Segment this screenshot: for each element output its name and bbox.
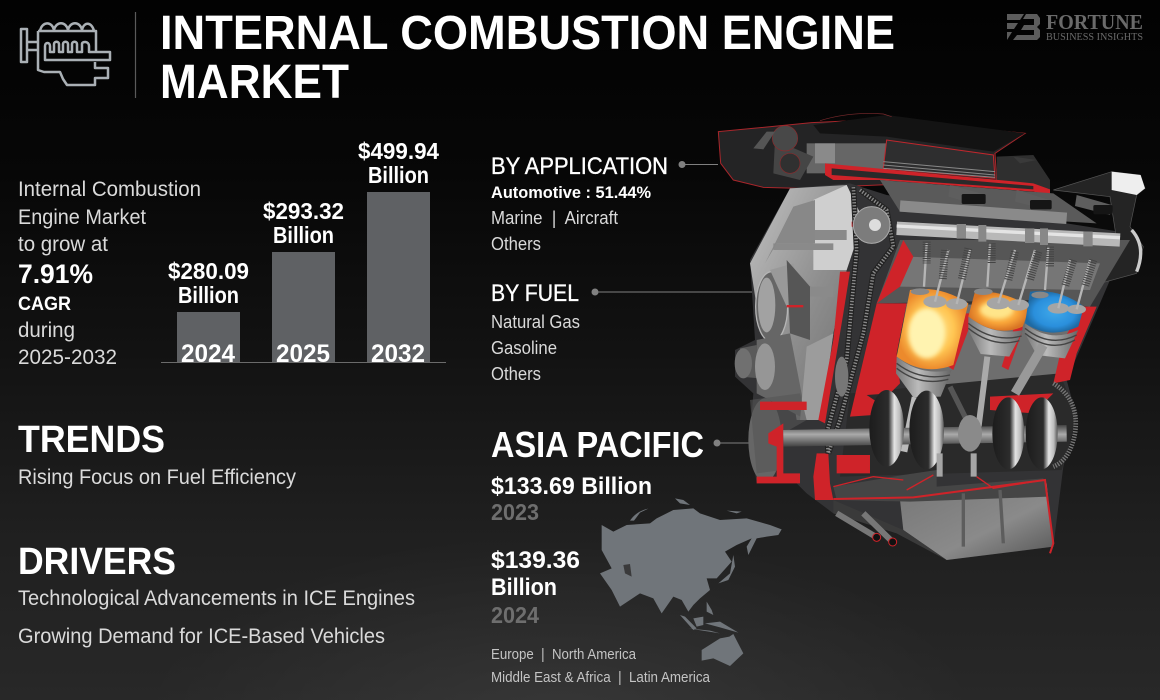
- flywheel: [1053, 383, 1076, 467]
- panel: Asia Pacific: $139.36: [491, 547, 580, 574]
- panel: by fuel: [491, 280, 580, 384]
- bar chart: market size: $293.32: [263, 198, 344, 224]
- timing cover: [750, 185, 863, 420]
- panel: by fuel: Gasoline: [491, 338, 557, 358]
- bar chart: market size: Billion: [273, 222, 334, 248]
- red head band: [825, 163, 1050, 195]
- panel: by application: Marine | Aircraft: [491, 208, 618, 228]
- title: MARKET: [160, 56, 349, 109]
- connecting rods: [904, 397, 915, 452]
- panel: drivers: Growing Demand for ICE-Based Vehicles: [18, 625, 385, 648]
- camshaft: [900, 206, 1067, 218]
- panel: Asia Pacific: $133.69 Billion: [491, 473, 652, 500]
- panel: by application: Others: [491, 234, 541, 254]
- crankshaft: [783, 433, 1067, 438]
- valves and springs: [911, 288, 1086, 314]
- panel: Asia Pacific: 2024: [491, 602, 539, 628]
- map: Asia Pacific: [600, 498, 782, 666]
- text block: CAGR summary: 7.91%: [18, 259, 93, 289]
- bar chart: market size: 2024: [181, 340, 235, 368]
- valve train bay: [877, 240, 1130, 307]
- cylinder walls: [897, 303, 1090, 393]
- pistons: [896, 357, 952, 397]
- panel: by application: [491, 153, 668, 254]
- ignition coils: [948, 185, 1113, 215]
- icon: engine outline: [21, 23, 110, 85]
- panel: trends: Rising Focus on Fuel Efficiency: [18, 466, 296, 489]
- text block: CAGR summary: Engine Market: [18, 206, 146, 229]
- cylinder 1 flame: [897, 289, 968, 369]
- bar chart: market size: 2032: [371, 340, 425, 368]
- bar chart: market size: [161, 138, 446, 368]
- logo: Fortune Business Insights: [1007, 10, 1143, 43]
- panel: drivers: Technological Advancements in ICE Engines: [18, 587, 415, 610]
- panel: drivers: DRIVERS: [18, 541, 176, 583]
- red cut sections: [787, 222, 1097, 500]
- panel: Asia Pacific: [491, 424, 711, 686]
- panel: Asia Pacific: Europe | North America: [491, 647, 637, 663]
- illustration: engine cutaway: [718, 113, 1145, 560]
- timing chain: [827, 187, 893, 453]
- cylinder 3 flame: [1025, 291, 1084, 333]
- text block: CAGR summary: Internal Combustion: [18, 178, 201, 201]
- title: [160, 7, 895, 109]
- title divider: [134, 12, 136, 98]
- bar chart: market size: 2025: [276, 340, 330, 368]
- panel: Asia Pacific: ASIA PACIFIC: [491, 424, 704, 465]
- bar chart: market size: Billion: [368, 162, 429, 188]
- text block: CAGR summary: 2025-2032: [18, 346, 117, 369]
- panel: by fuel: Others: [491, 364, 541, 384]
- panel: Asia Pacific: 2023: [491, 499, 539, 525]
- oil pipes: [837, 513, 893, 542]
- bar chart: market size: $499.94: [358, 138, 439, 164]
- panel: by application: BY APPLICATION: [491, 153, 668, 180]
- callout connectors: [592, 161, 756, 446]
- panel: Asia Pacific: Middle East & Africa | Latin America: [491, 670, 711, 686]
- bar chart: market size: $280.09: [168, 258, 249, 284]
- text block: CAGR summary: [18, 178, 201, 369]
- panel: by application: Automotive : 51.44%: [491, 183, 651, 202]
- panel: by fuel: BY FUEL: [491, 280, 579, 307]
- panel: trends: [18, 419, 296, 489]
- oil sump: [900, 483, 1053, 560]
- text block: CAGR summary: CAGR: [18, 294, 71, 315]
- panel: by fuel: Natural Gas: [491, 312, 580, 332]
- engine silhouette: [735, 183, 1130, 560]
- text block: CAGR summary: to grow at: [18, 233, 108, 256]
- logo: Fortune Business Insights: BUSINESS INSIGHTS: [1046, 32, 1143, 43]
- panel: drivers: [18, 541, 415, 648]
- lower pulley: [748, 398, 782, 482]
- cylinder 2 flame: [968, 292, 1030, 331]
- crank bay: [840, 373, 1077, 477]
- intake cover: [718, 119, 1025, 188]
- title: INTERNAL COMBUSTION ENGINE: [160, 7, 895, 60]
- bar chart: market size: Billion: [178, 282, 239, 308]
- panel: Asia Pacific: Billion: [491, 574, 557, 601]
- panel: trends: TRENDS: [18, 419, 165, 461]
- logo: Fortune Business Insights: FORTUNE: [1046, 10, 1143, 34]
- right end: [1053, 172, 1145, 283]
- text block: CAGR summary: during: [18, 319, 75, 342]
